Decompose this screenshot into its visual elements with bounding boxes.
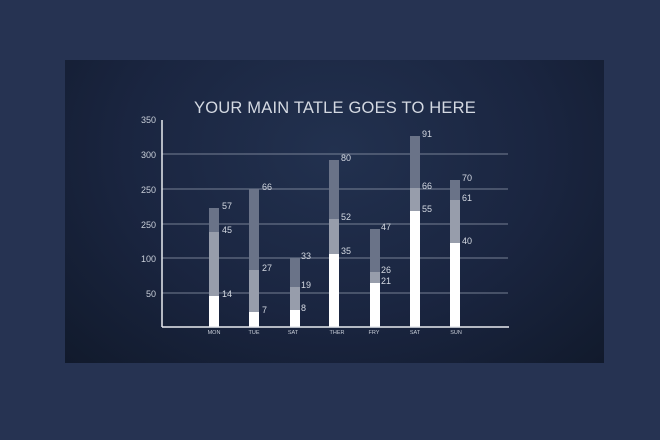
x axis labels — [208, 330, 462, 336]
value labels: 19 — [301, 280, 311, 290]
bars — [209, 136, 460, 327]
title: YOUR MAIN TATLE GOES TO HERE — [194, 99, 476, 117]
value labels: 55 — [422, 204, 432, 214]
value labels: 66 — [422, 181, 432, 191]
gridlines — [162, 154, 508, 293]
value labels: 21 — [381, 276, 391, 286]
value labels: 57 — [222, 201, 232, 211]
y axis labels: 250 — [141, 185, 156, 195]
y axis labels: 350 — [141, 115, 156, 125]
x axis labels: TUE — [248, 330, 260, 336]
value labels: 70 — [462, 173, 472, 183]
panel: chart card — [65, 60, 604, 363]
value labels: 27 — [262, 263, 272, 273]
y axis labels: 50 — [146, 289, 156, 299]
value labels: 61 — [462, 193, 472, 203]
y axis labels: 100 — [141, 254, 156, 264]
x axis labels: FRY — [369, 330, 380, 336]
value labels: 52 — [341, 212, 351, 222]
value labels: 7 — [262, 305, 267, 315]
value labels: 40 — [462, 236, 472, 246]
axes — [162, 120, 509, 327]
y axis labels: 250 — [141, 220, 156, 230]
value labels: 66 — [262, 182, 272, 192]
x axis labels: SAT — [410, 330, 421, 336]
value labels: 14 — [222, 289, 232, 299]
value labels: 33 — [301, 251, 311, 261]
value labels: 47 — [381, 222, 391, 232]
value labels: 35 — [341, 246, 351, 256]
value labels: 26 — [381, 265, 391, 275]
value labels: 91 — [422, 129, 432, 139]
x axis labels: SAT — [288, 330, 299, 336]
y axis labels: 300 — [141, 150, 156, 160]
x axis labels: SUN — [450, 330, 462, 336]
value labels — [222, 129, 472, 315]
value labels: 80 — [341, 153, 351, 163]
value labels: 8 — [301, 303, 306, 313]
y axis labels — [141, 115, 156, 299]
x axis labels: MON — [208, 330, 220, 336]
x axis labels: THER — [330, 330, 345, 336]
value labels: 45 — [222, 225, 232, 235]
